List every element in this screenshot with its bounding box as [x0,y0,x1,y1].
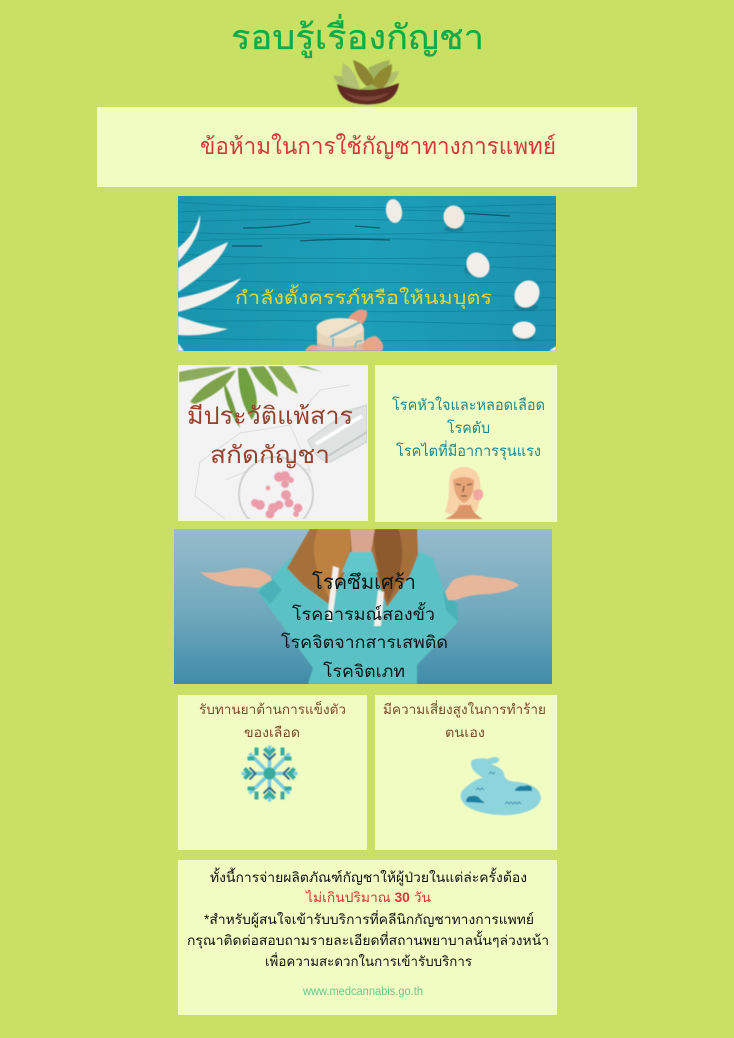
text: self-harm risk [383,700,546,740]
heading: contraindications: ข้อห้ามในการใช้กัญชาทางการแพทย์ [200,133,556,159]
text: mental illnesses: โรคจิตเภท [323,661,405,681]
icon: lake [460,757,541,815]
text: clinic instructions: *สำหรับผู้สนใจเข้ารับบริการที่คลีนิกกัญชาทางการแพทย์ [204,910,534,928]
panel: heart and organ disease [375,365,557,522]
text: disease list: โรคหัวใจและหลอดเลือด [392,396,545,414]
panel: mental illness photo [174,529,552,684]
icon: glass bottle [308,405,367,462]
text: clinic instructions [187,910,549,969]
icon: woman shrugging [200,529,519,684]
text: mental illnesses: โรคจิตจากสารเสพติด [281,632,448,652]
text: self-harm risk: ตนเอง [445,725,485,740]
text: disease list: โรคตับ [447,419,490,437]
icon: hand holding jar [305,310,383,351]
icon: bowl of leaves [333,60,399,104]
icon: snowflake [242,746,298,802]
text: anticoagulants: ของเลือด [244,725,300,740]
panel: footer note [178,860,557,1015]
text: mental illnesses: โรคซึมเศร้า [312,571,416,594]
caption: pregnancy: กำลังตั้งครรภ์หรือให้นมบุตร [235,284,492,310]
text: dispensing limit: ทั้งนี้การจ่ายผลิตภัณฑ์กัญชาให้ผู้ป่วยในแต่ล่ะครั้งต้อง [210,867,527,886]
icon: white stones [384,198,556,351]
panel: allergy photo [178,365,368,531]
text: mental illnesses [281,571,448,681]
caption: allergy [187,403,353,469]
caption: allergy: มีประวัติแพ้สาร [187,403,353,430]
icon: green leaves [179,366,322,428]
text: clinic instructions: กรุณาติดต่อสอบถามรายละเอียดที่สถานพยาบาลนั้นๆล่วงหน้า [187,930,549,949]
panel: anticoagulants [178,695,367,850]
icon: palm fronds [178,215,241,351]
text: disease list: โรคไตที่มีอาการรุนแรง [396,440,541,461]
icon: petri dish with capsules [238,456,314,519]
text: mental illnesses: โรคอารมณ์สองขั้ว [292,602,435,624]
panel: pregnancy photo [178,196,556,351]
text: self-harm risk: มีความเสี่ยงสูงในการทำร้าย [383,700,546,718]
text: anticoagulants: รับทานยาต้านการแข็งตัว [199,700,346,717]
text: clinic instructions: เพื่อความสะดวกในการเข้ารับบริการ [265,952,472,969]
caption: allergy: สกัดกัญชา [210,442,330,469]
text: disease list [392,396,545,461]
panel: header [97,107,637,187]
icon: woman face [445,467,483,519]
text: anticoagulants [199,700,346,740]
panel: self-harm risk [375,695,557,850]
title: รอบรู้เรื่องกัญชา [231,14,484,58]
text: 30 day limit: ไม่เกินปริมาณ 30 วัน [305,890,431,905]
text: website: www.medcannabis.go.th [302,984,423,998]
